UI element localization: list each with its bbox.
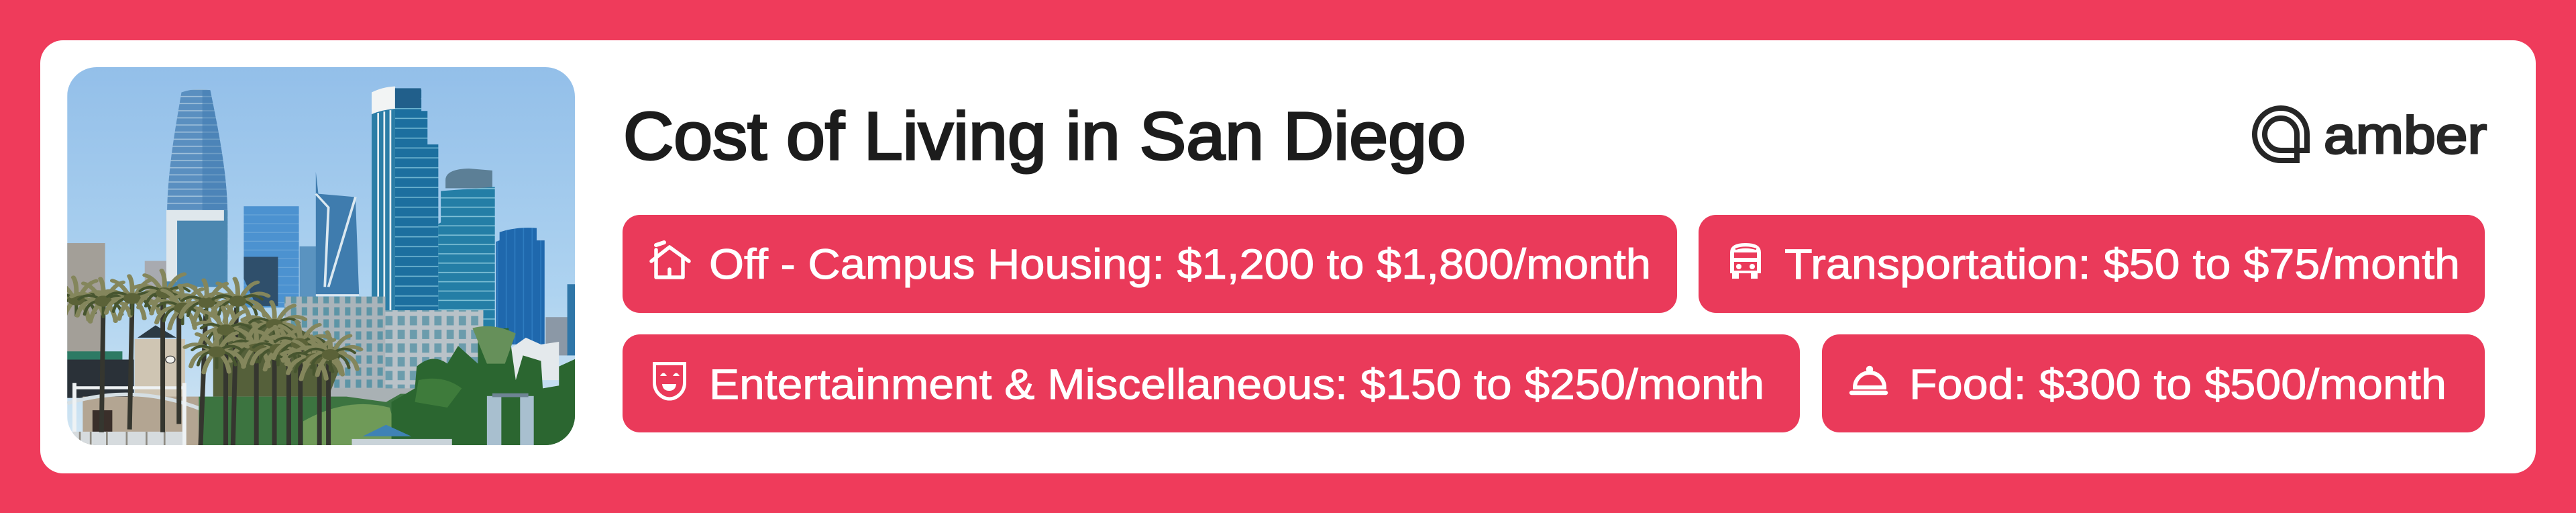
- housing cost text: Off - Campus Housing: $1,200 to $1,800/month: [709, 241, 1651, 288]
- icon: house: [651, 242, 689, 277]
- pill: entertainment and miscellaneous: [623, 334, 1800, 432]
- pill: transportation: [1699, 215, 2485, 313]
- pill: food: [1822, 334, 2485, 432]
- dark palm understory: [213, 317, 339, 397]
- pill: off-campus housing: [623, 215, 1677, 313]
- foreground greenery: [199, 394, 577, 445]
- logo: amber: [2255, 105, 2487, 165]
- food cost text: Food: $300 to $500/month: [1909, 361, 2447, 408]
- title: Cost of Living in San Diego: [623, 99, 1466, 174]
- icon: mask: [655, 364, 684, 399]
- icon: bus: [1730, 243, 1761, 279]
- logo wordmark: amber: [2324, 105, 2487, 165]
- icon: amber mark: [2255, 108, 2307, 160]
- palm trunks: [101, 298, 329, 445]
- photo: city skyline: [44, 67, 577, 445]
- entertainment cost text: Entertainment & Miscellaneous: $150 to $250/month: [709, 361, 1764, 408]
- icon: food cloche: [1851, 367, 1886, 393]
- transportation cost text: Transportation: $50 to $75/month: [1784, 241, 2460, 288]
